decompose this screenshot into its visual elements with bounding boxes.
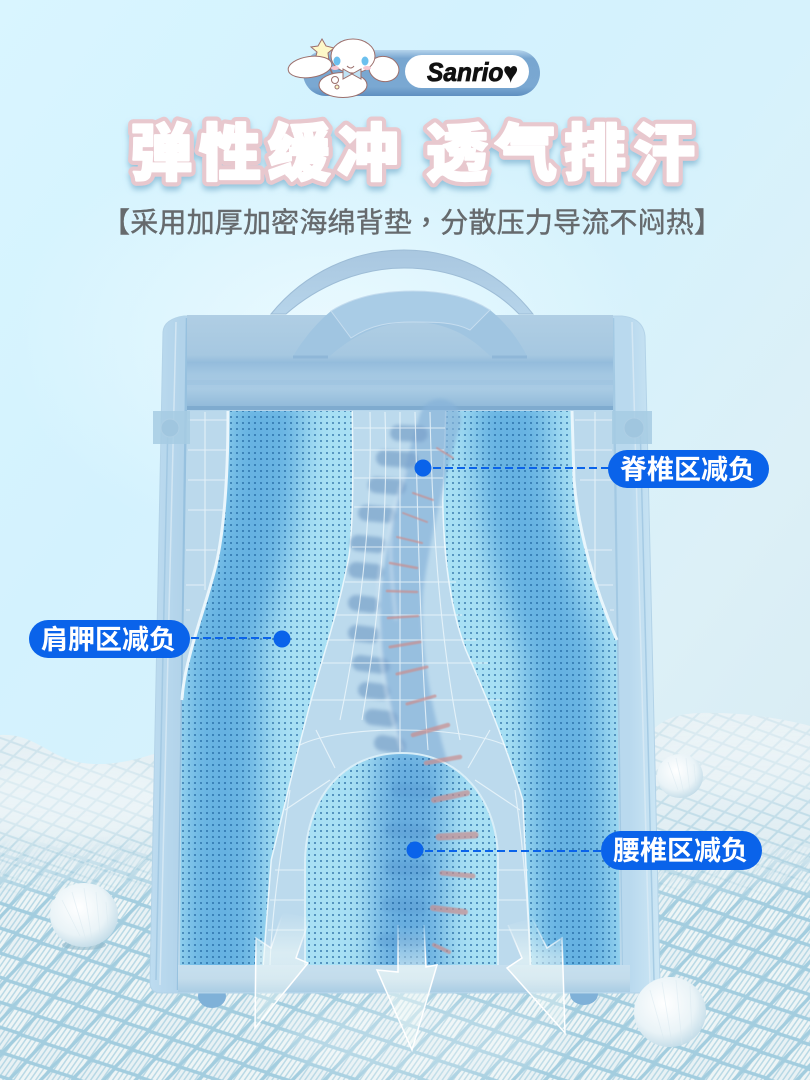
title: 缓 [268,120,330,189]
ball: rear right [657,754,703,798]
title: 性 [199,120,261,189]
center channel [264,411,530,965]
logo white pill [405,55,529,88]
ball: front right [634,977,706,1047]
backpack [150,250,660,1008]
title: 排 [564,120,626,189]
title: 透 [426,120,488,189]
spine ribs [387,448,475,952]
title: 汗 [633,120,695,189]
title: 冲 [337,120,399,189]
title: 性 [199,120,261,189]
ball: left [50,883,118,950]
strap clip right [612,411,652,444]
left foam pad [180,411,354,965]
title: 弹 [130,120,192,189]
mesh back panel [178,411,622,966]
callout: spine zone [414,450,769,488]
callout: shoulder blade zone [29,620,290,658]
title: 透 [426,120,488,189]
side rails [156,318,654,990]
icon: mascot with wand [287,39,401,98]
carry handle arc [271,250,533,314]
spine illustration [356,420,440,770]
right foam pad [442,411,620,965]
callout: lumbar zone: 腰椎区减负 [613,836,748,866]
airflow arrow left [255,912,310,1028]
title: 冲 [337,120,399,189]
callout: spine zone: 脊椎区减负 [620,455,755,485]
title: 排 [564,120,626,189]
callout: shoulder blade zone: 肩胛区减负 [41,625,176,655]
feet [198,983,598,1008]
title: 气 [495,120,557,189]
title: 弹 [130,120,192,189]
lumbar arch foam pad [304,752,499,965]
center grid lines [268,412,530,965]
logo plate [303,50,540,96]
title: 缓 [268,120,330,189]
bag body frame [150,316,660,993]
inner handle base [292,291,528,358]
airflow arrow center [377,925,437,1050]
airflow arrow right [507,918,565,1033]
subtitle: 【采用加厚加密海绵背垫，分散压力导流不闷热】 [102,201,722,241]
title: 气 [495,120,557,189]
Sanrio wordmark: Sanrio♥ [427,57,518,87]
top flap panel [187,315,613,410]
strap clip left [153,411,190,444]
brand logo [287,39,540,98]
mesh fabric ground [0,710,810,1080]
title [130,120,695,189]
side grid lines [186,412,614,610]
callout: lumbar zone [406,831,762,870]
bottom band [178,965,630,992]
title: 汗 [633,120,695,189]
